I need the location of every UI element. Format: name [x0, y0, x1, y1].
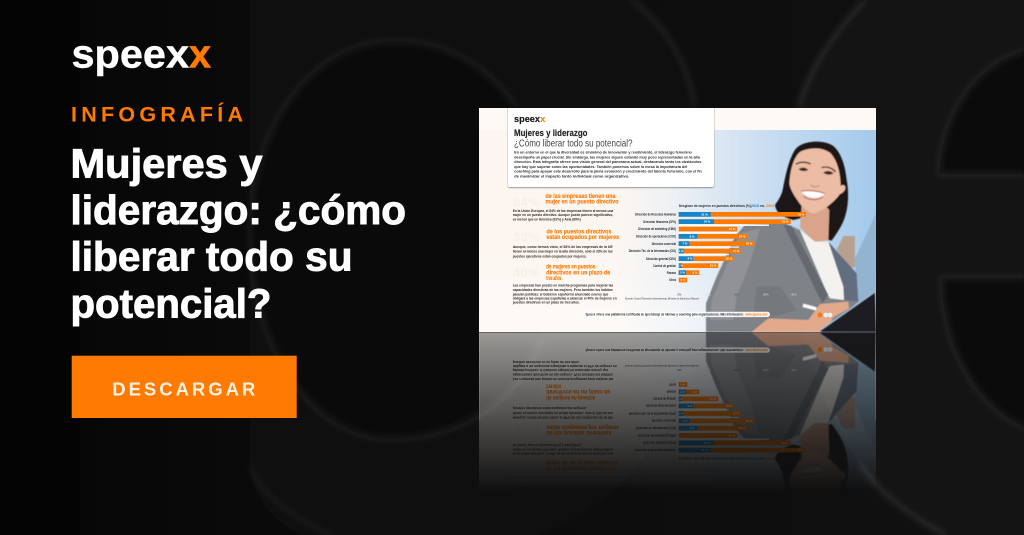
- stat: 84%: mujer en un puesto directivo. Aunque puede parecer significativo,: [513, 213, 613, 217]
- main heading: potencial?: [70, 280, 272, 326]
- axis and source: 30%: [763, 292, 769, 296]
- axis and source: Fuente: Grant Thornton International, Women in Business Report: [625, 296, 699, 300]
- card intro text: [514, 151, 702, 178]
- forearm and hand: [752, 302, 849, 332]
- stat: 33%: de los puestos directivos: [546, 228, 612, 236]
- card reflection: [479, 332, 876, 482]
- category labels: Dirección de marketing (CMO): [638, 227, 676, 231]
- bar values: 31 %: [733, 249, 740, 253]
- stat: 40%: puestos directivos en un plazo de tres años.: [513, 301, 580, 305]
- stat: 84%: [513, 193, 619, 221]
- logo: speexx: x: [189, 32, 211, 76]
- photo: businesswoman with tablet: [706, 142, 876, 332]
- bar values: 8 %: [688, 257, 693, 261]
- bar values: 1 %: [678, 264, 683, 268]
- stat: 84%: es menor que en América (92%) y Asia (89%): [513, 217, 581, 221]
- axis and source: 40%: [791, 292, 797, 296]
- stat: 84%: de las empresas tienen una: [546, 193, 616, 200]
- hair: [775, 142, 848, 241]
- category labels: Otros: [669, 278, 676, 282]
- jacket: [706, 223, 858, 332]
- stat: 40%: pasarán políticas: el Gobierno español ha anunciado una ley que: [513, 292, 608, 296]
- chart title: 2015: [751, 204, 759, 208]
- pale bar shadows: [679, 224, 769, 255]
- face: [789, 148, 845, 213]
- stat: 40%: capacidades directivas de las mujeres. Pero también los hábitos: [513, 288, 613, 292]
- footer pill with link: Speexx ofrece una plataforma certificada de aprendizaje de idiomas y coaching para organizaciones. Más información:: [586, 312, 744, 316]
- lapel: [783, 224, 828, 303]
- card subtitle: ¿Cómo liberar todo su potencial?: [514, 139, 633, 150]
- stat: 33%: [513, 228, 619, 258]
- bar values: 5 %: [681, 278, 686, 282]
- bar values: 8 %: [693, 271, 698, 275]
- main heading: [70, 140, 406, 326]
- bar values: 34 %: [739, 234, 746, 238]
- category labels: Control de gestión: [653, 264, 676, 268]
- bar values: 4 %: [679, 249, 684, 253]
- card intro text: de maximizar el impacto tanto individual como organizativo.: [514, 174, 629, 178]
- stat: 40%: [513, 264, 617, 305]
- category labels: Dirección de operaciones (COO): [636, 234, 676, 238]
- chart title: vs.: [760, 204, 765, 208]
- axis and source: 20%: [734, 292, 740, 296]
- category labels: [629, 212, 676, 282]
- white summary box: [508, 104, 714, 187]
- stat: 84%: mujer en un puesto directivo: [546, 199, 619, 206]
- bar values: 49 %: [798, 212, 805, 216]
- bar values: 43 %: [782, 220, 789, 224]
- main heading: liberar todo su: [70, 234, 352, 280]
- footer pill with link: www.speexx.com: [745, 312, 768, 316]
- stat: 33%: puestos ejecutivos están ocupados por mujeres.: [513, 254, 587, 258]
- kicker: infografía: INFOGRAFÍA: [71, 102, 243, 127]
- bar values: 21 %: [710, 264, 717, 268]
- axis and source: 10%: [705, 292, 711, 296]
- card intro text: desempeña un papel crucial. Sin embargo, las mujeres siguen estando muy poco representadas en la alta: [514, 155, 700, 159]
- reflection frame: [480, 332, 876, 420]
- logo: speexx: speex: [72, 32, 189, 76]
- button: descargar: [72, 356, 297, 418]
- category labels: Dirección financiera (CFO): [643, 220, 676, 224]
- tablet: [821, 292, 876, 332]
- bar values: 7 %: [683, 242, 688, 246]
- stat: 84%: En la Unión Europea, el 84% de las empresas tienen al menos una: [513, 209, 613, 213]
- bar chart: women in leadership roles: [625, 204, 806, 300]
- category labels: Dirección de Recursos Humanos: [635, 212, 676, 216]
- chart title: 2024: [766, 204, 774, 208]
- main heading: Mujeres y: [70, 140, 263, 186]
- bar values: 31 %: [729, 227, 736, 231]
- card logo: x: [540, 114, 546, 124]
- stat: 40%: directivos en un plazo de: [546, 269, 611, 276]
- left letter counter: [250, 41, 548, 439]
- stat: 84%: 84%: [513, 196, 540, 210]
- bar values: 34 %: [704, 220, 711, 224]
- category labels: Dirección general (CEO): [646, 257, 676, 261]
- stat: 33%: tienen al menos una mujer en la alta dirección, sólo el 33% de los: [513, 250, 613, 254]
- stat: 40%: 40%: [513, 266, 540, 280]
- shirt: [800, 230, 844, 300]
- card logo: speex: [514, 114, 540, 124]
- card logo: [514, 116, 546, 124]
- bar values: [678, 212, 805, 282]
- bar values: 8 %: [690, 234, 695, 238]
- right letter counters: [939, 51, 1024, 174]
- card title: Mujeres y liderazgo: [514, 128, 588, 139]
- category labels: Dirección comercial: [652, 242, 676, 246]
- axis and source: [625, 292, 797, 300]
- bar values: 31 %: [701, 212, 708, 216]
- stat: 33%: Aunque, como hemos visto, el 84% de las empresas de la UE: [513, 245, 613, 249]
- stat: 40%: obligará a las empresas españolas a alcanzar el 40% de mujeres en: [513, 297, 617, 301]
- bar values: 38 %: [746, 242, 753, 246]
- chart title: Desglose de mujeres en puestos directivos (%),: [679, 204, 752, 208]
- card intro text: que hay que superar como las oportunidades. También ponemos sobre la mesa la importancia del: [514, 165, 687, 169]
- button: descargar: DESCARGAR: [112, 379, 255, 400]
- stat: 40%: de mujeres en puestos: [546, 264, 596, 271]
- stat: 33%: están ocupados por mujeres: [546, 234, 619, 241]
- stat: 33%: 33%: [513, 230, 540, 244]
- stat: 40%: Las empresas han puesto en marcha programas para mejorar las: [513, 284, 613, 288]
- axis and source: 0%: [678, 292, 682, 296]
- footer pill with link: [583, 312, 832, 317]
- main heading: liderazgo: ¿cómo: [70, 187, 406, 233]
- neck: [800, 205, 829, 243]
- bar values: 25 %: [726, 257, 733, 261]
- category labels: Fianzas: [667, 271, 676, 275]
- card intro text: dirección. Esta infografía ofrece una visión general del panorama actual, destacando tanto los obstáculos: [514, 160, 701, 164]
- bars: [679, 212, 806, 282]
- stat: 40%: tres años: [546, 275, 562, 282]
- bar values: 5 %: [680, 271, 685, 275]
- card intro text: coaching para apoyar este desarrollo para la plena evolución y crecimiento del talento femenino, con el fin: [514, 170, 702, 174]
- card intro text: En un entorno en el que la diversidad es sinónimo de innovación y rendimiento, el liderazgo femenino: [514, 151, 692, 155]
- category labels: Dirección Téc. de la Información (CIO): [629, 249, 676, 253]
- infographic preview card: [479, 104, 876, 332]
